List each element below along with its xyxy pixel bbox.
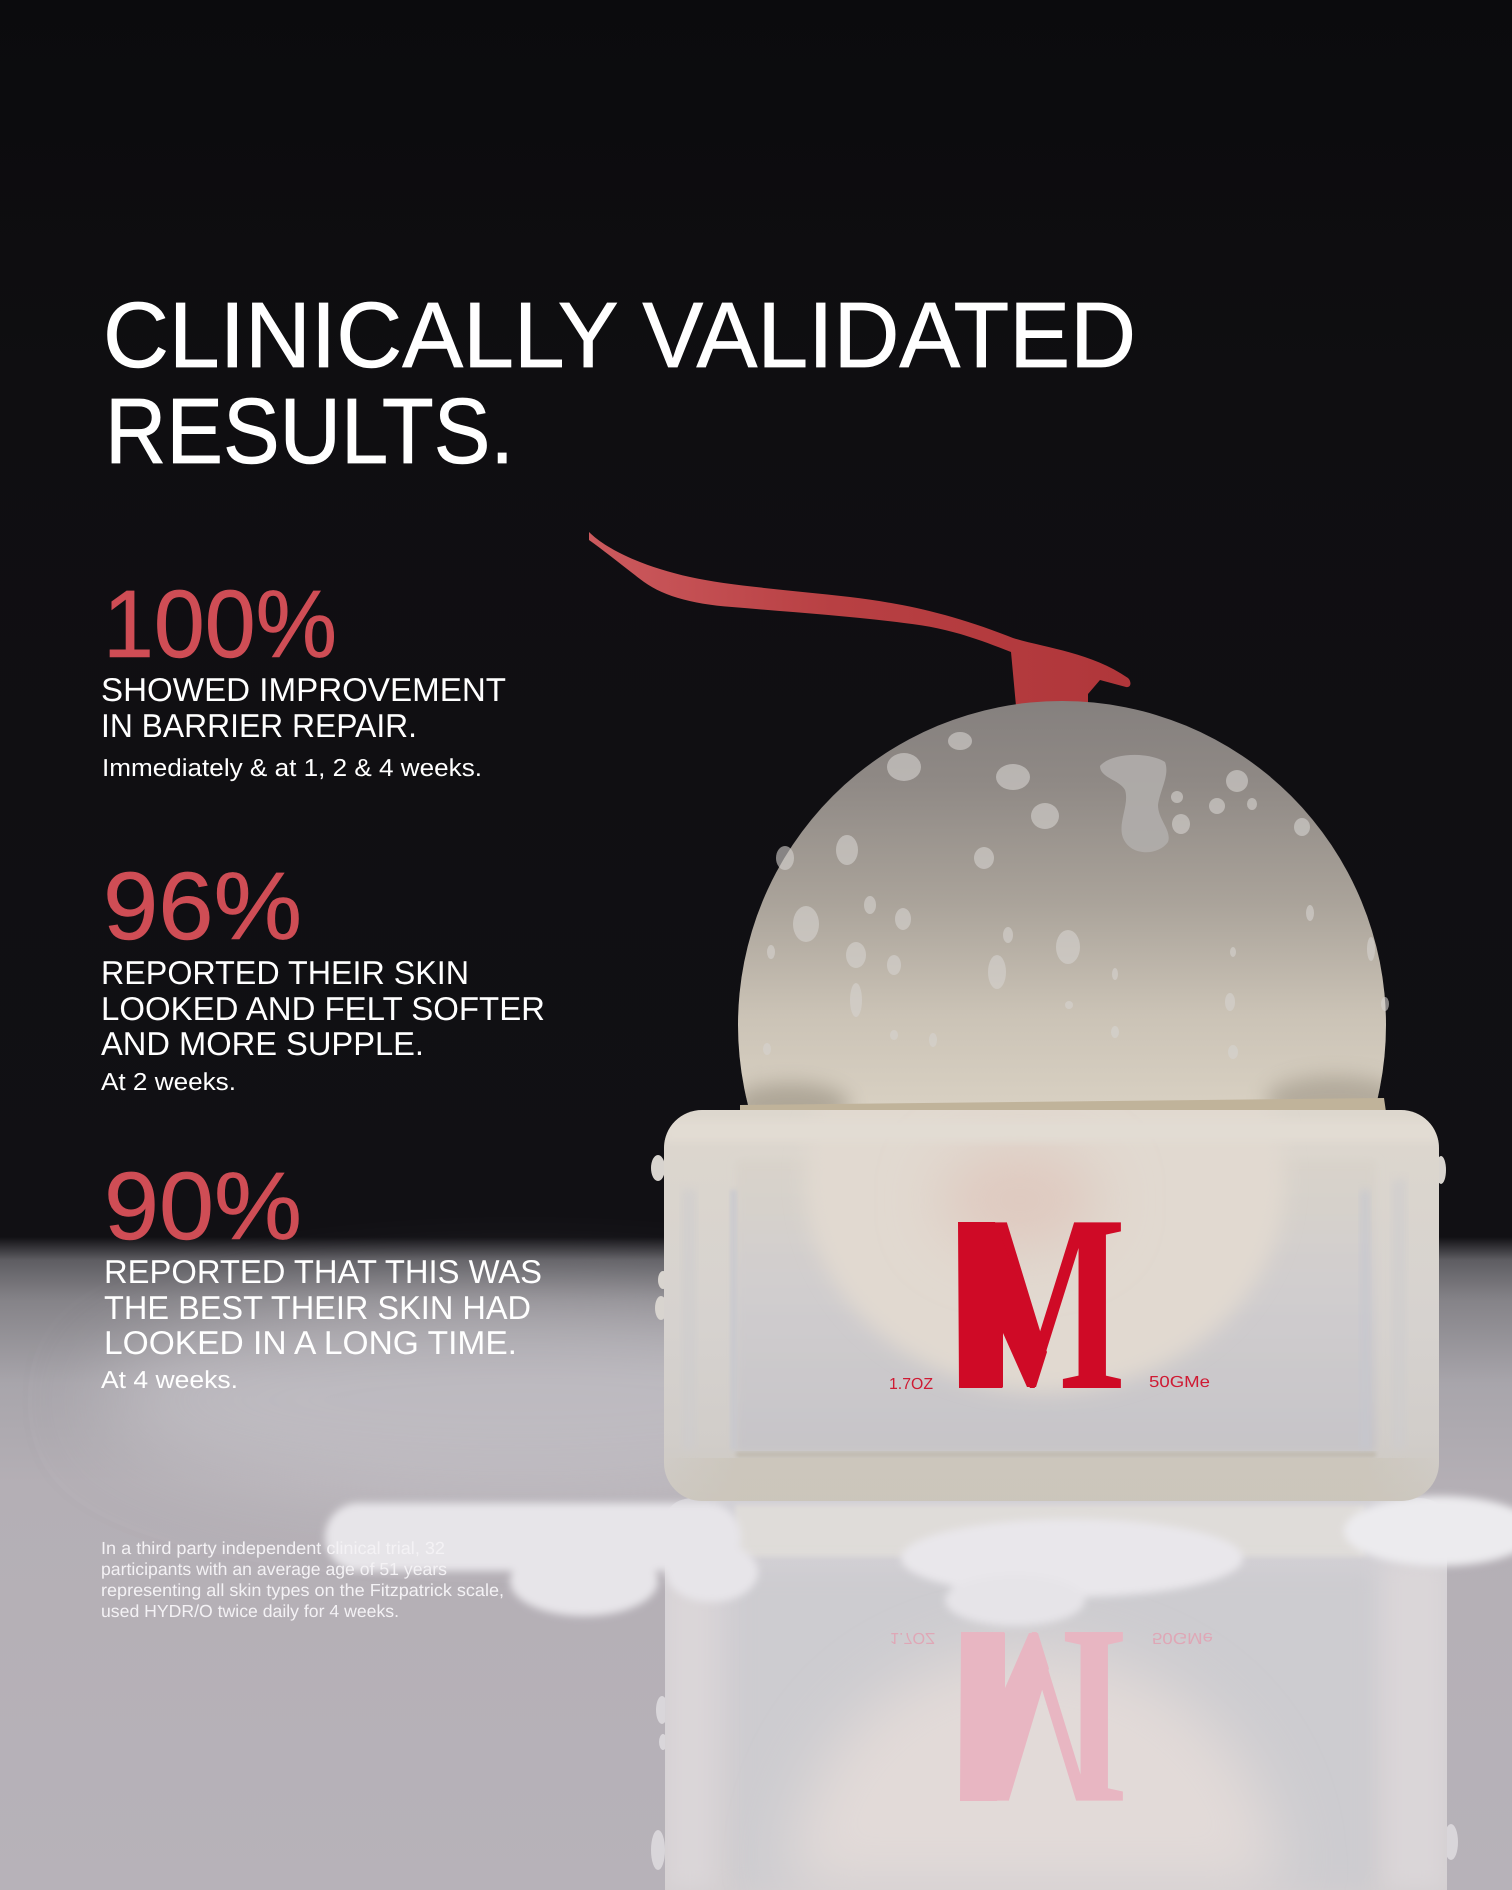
timing note: Immediately & at 1, 2 & 4 weeks.: [102, 755, 482, 782]
inner jar window: [738, 1310, 1373, 1449]
large running droplet: [1100, 755, 1169, 852]
stat: 90%: [101, 1153, 542, 1394]
soft surface glow: [100, 1300, 940, 1500]
description: LOOKED IN A LONG TIME.: [104, 1324, 517, 1361]
description: [104, 1253, 542, 1361]
footnote: In a third party independent clinical trial, 32: [101, 1538, 445, 1558]
figure: 100%: [103, 571, 337, 678]
description: REPORTED THEIR SKIN: [101, 954, 469, 991]
frosted glass jar: [651, 1110, 1446, 1501]
reflected size labels: 50GMe: [1152, 1629, 1213, 1646]
footnote: participants with an average age of 51 years: [101, 1559, 447, 1579]
title: CLINICALLY VALIDATED: [103, 283, 1136, 387]
footnote: used HYDR/O twice daily for 4 weeks.: [101, 1601, 399, 1621]
water beads on reflection: [651, 1696, 1458, 1870]
title: RESULTS.: [105, 379, 514, 483]
title: [103, 283, 1136, 483]
product reflection on the surface: [651, 1498, 1458, 1890]
footnote: [101, 1538, 504, 1621]
timing note: At 4 weeks.: [101, 1367, 238, 1394]
timing note: At 2 weeks.: [101, 1069, 236, 1096]
frosted dome with water droplets: [730, 695, 1405, 1127]
reflected logo M: M: [960, 1576, 1128, 1861]
figure: 96%: [103, 853, 302, 960]
logo M: M: [958, 1163, 1126, 1443]
label: ounces: 1.7OZ: [889, 1376, 933, 1393]
small droplets: [763, 732, 1389, 1059]
description: [101, 671, 506, 744]
label: grams: 50GMe: [1149, 1374, 1210, 1391]
description: IN BARRIER REPAIR.: [101, 707, 417, 744]
description: REPORTED THAT THIS WAS: [104, 1253, 542, 1290]
water beads on jar sides: [651, 1155, 1446, 1320]
reflected size labels: 1.7OZ: [890, 1629, 935, 1646]
red spatula: [589, 532, 1130, 706]
figure: 90%: [104, 1153, 302, 1260]
milky cream puddles on the surface: [325, 1496, 1512, 1626]
footnote: representing all skin types on the Fitzpatrick scale,: [101, 1580, 504, 1600]
gold lid collar: [740, 1098, 1386, 1112]
description: AND MORE SUPPLE.: [101, 1025, 424, 1062]
description: [101, 954, 545, 1062]
stat: 100%: [101, 571, 506, 782]
jar body: [664, 1110, 1439, 1501]
description: THE BEST THEIR SKIN HAD: [104, 1289, 531, 1326]
dome seen through the glass: [812, 1168, 1278, 1396]
stat: 96%: [101, 853, 545, 1096]
description: LOOKED AND FELT SOFTER: [101, 990, 545, 1027]
description: SHOWED IMPROVEMENT: [101, 671, 506, 708]
reflected size labels: [890, 1629, 1213, 1646]
